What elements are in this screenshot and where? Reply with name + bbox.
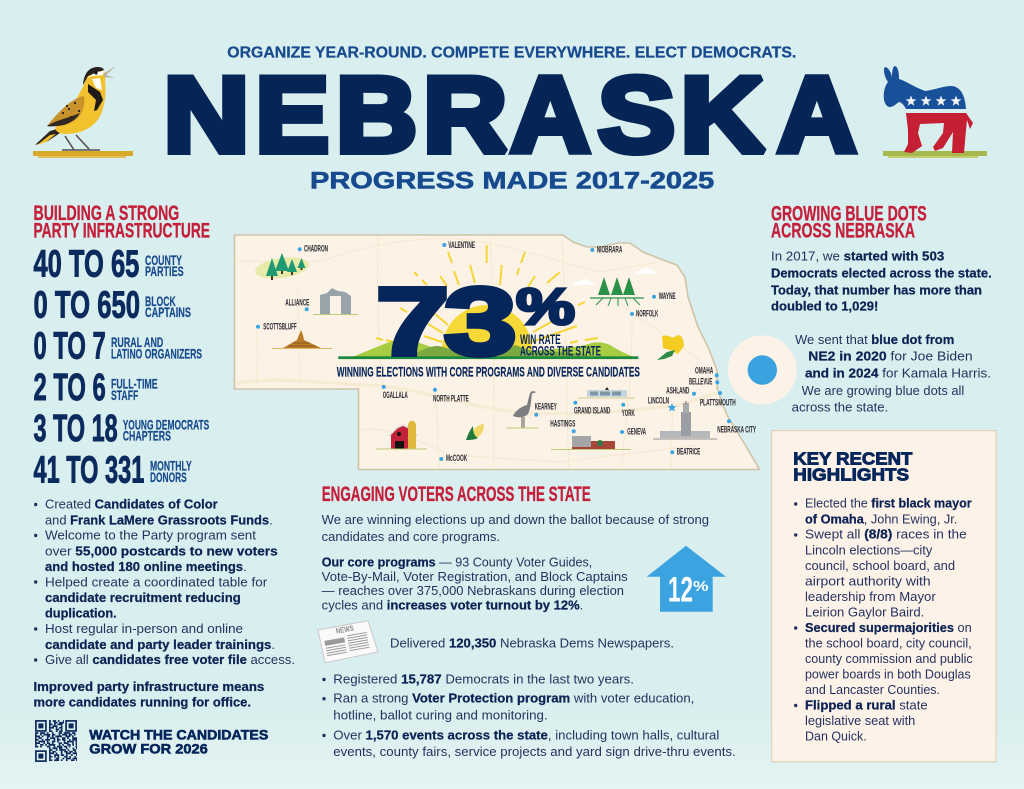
highlights list: county commission and public xyxy=(805,651,973,666)
text block: blue dot from NE2: across the state. xyxy=(792,399,888,414)
text block: infrastructure bullets xyxy=(34,497,295,667)
map panel: Nebraska xyxy=(234,235,760,470)
stat: rural and latino organizers: RURAL AND xyxy=(111,334,163,350)
heading: growing blue dots: ACROSS NEBRASKA xyxy=(771,220,915,243)
heading: growing blue dots: GROWING BLUE DOTS xyxy=(771,202,927,225)
icon: newspaper xyxy=(318,621,378,663)
map cities: KEARNEY xyxy=(535,402,557,412)
map cities: ASHLAND xyxy=(666,385,689,395)
highlights list: Swept all (8/8) races in the xyxy=(805,527,967,542)
callout: improved party infrastructure xyxy=(34,679,264,710)
highlights list: the school board, city council, xyxy=(805,635,972,650)
map cities: BEATRICE xyxy=(677,447,700,457)
map cities: NEBRASKA CITY xyxy=(717,425,756,435)
map cities: OGALLALA xyxy=(383,390,408,400)
arrow: 12% turnout increase xyxy=(647,546,726,612)
title xyxy=(164,54,856,175)
stat: full-time staff: 2 TO 6 xyxy=(34,367,106,409)
heading: building a strong party infrastructure: BUILDING A STRONG xyxy=(34,202,179,225)
map cities: CHADRON xyxy=(304,244,328,254)
text block: 503 to 1,029: In 2017, we started with 503 xyxy=(771,249,944,264)
text block: voter engagement bullets xyxy=(322,671,736,759)
map cities: WAYNE xyxy=(659,291,676,301)
map cities: OMAHA xyxy=(695,365,714,375)
text block: blue dot from NE2: We sent that blue dot from xyxy=(795,332,954,347)
text block: core programs xyxy=(322,555,628,612)
title: A xyxy=(778,54,856,174)
callout: improved party infrastructure: Improved party infrastructure means xyxy=(34,679,264,694)
stat: county parties: COUNTY xyxy=(145,252,182,268)
stat: full-time staff: FULL-TIME xyxy=(111,376,158,392)
text block: infrastructure bullets: Host regular in-person and online xyxy=(45,621,243,636)
panel heading: HIGHLIGHTS xyxy=(793,464,909,484)
map cities: McCOOK xyxy=(446,453,468,463)
heading: growing blue dots xyxy=(771,202,927,243)
text block: infrastructure bullets: and hosted 180 online meetings . xyxy=(45,559,247,574)
win rate figure 73%: 7 xyxy=(376,269,449,375)
text block: infrastructure bullets: Welcome to the Party program sent xyxy=(45,528,256,543)
stat: monthly donors: DONORS xyxy=(150,469,187,485)
icon: QR code xyxy=(35,721,77,761)
text block: 503 to 1,029 xyxy=(771,249,992,314)
text block: infrastructure bullets: Give all candidates free voter file access. xyxy=(45,652,295,667)
map cities: GRAND ISLAND xyxy=(574,406,610,416)
title: S xyxy=(598,54,675,175)
subtitle: PROGRESS MADE 2017-2025 xyxy=(310,167,714,194)
stat: young democrats chapters: CHAPTERS xyxy=(123,428,171,444)
highlights list: Flipped a rural state xyxy=(805,697,928,712)
icon: corn xyxy=(466,424,484,440)
icon: Chimney Rock xyxy=(272,330,332,348)
text block: winning elections: candidates and core programs. xyxy=(322,529,500,544)
title: R xyxy=(423,55,507,174)
icon: Grand Island building xyxy=(578,387,635,398)
text block: infrastructure bullets: Helped create a coordinated table for xyxy=(45,574,268,589)
highlights list: council, school board, and xyxy=(805,558,955,573)
text block: infrastructure bullets: over 55,000 postcards to new voters xyxy=(45,543,278,558)
text block: infrastructure bullets: duplication. xyxy=(45,606,117,621)
icon: Hastings building xyxy=(551,436,631,450)
icon: goldenrod xyxy=(657,335,684,360)
title: K xyxy=(680,55,765,174)
icon: farm trees xyxy=(590,277,644,306)
highlights list: Lincoln elections—city xyxy=(805,542,933,557)
panel heading: KEY RECENT xyxy=(793,448,913,468)
tagline: ORGANIZE YEAR-ROUND. COMPETE EVERYWHERE. ELECT DEMOCRATS. xyxy=(227,45,796,62)
title: A xyxy=(510,56,590,175)
text block: blue dot from NE2: We are growing blue dots all xyxy=(802,383,964,398)
stat: rural and latino organizers xyxy=(34,325,202,367)
text block: voter engagement bullets: Ran a strong Voter Protection program with voter education, xyxy=(333,691,694,706)
stat: monthly donors: MONTHLY xyxy=(150,458,192,474)
text block: blue dot from NE2: NE2 in 2020 for Joe Biden xyxy=(808,349,973,364)
heading: building a strong party infrastructure xyxy=(34,202,210,243)
text block: blue dot from NE2: and in 2024 for Kamala Harris. xyxy=(805,366,991,381)
stat: young democrats chapters: YOUNG DEMOCRATS xyxy=(123,416,209,432)
stat: young democrats chapters: 3 TO 18 xyxy=(34,408,118,450)
highlights list: Leirion Gaylor Baird. xyxy=(805,604,924,619)
stat: rural and latino organizers: 0 TO 7 xyxy=(34,325,106,367)
call to action: watch the candidates xyxy=(89,727,268,756)
text block: core programs: Vote-By-Mail, Voter Registration, and Block Captains xyxy=(322,569,628,584)
panel: key recent highlights xyxy=(772,431,996,762)
heading: building a strong party infrastructure: PARTY INFRASTRUCTURE xyxy=(34,220,210,243)
highlights list: legislative seat with xyxy=(805,713,915,728)
stat: rural and latino organizers: LATINO ORGANIZERS xyxy=(111,345,202,361)
map cities: NORTH PLATTE xyxy=(433,393,469,403)
highlights list xyxy=(794,496,973,743)
icon: Carhenge arch xyxy=(313,288,358,314)
title: B xyxy=(336,56,417,175)
stat: county parties: 40 TO 65 xyxy=(34,244,139,286)
stat: county parties: PARTIES xyxy=(145,263,184,279)
text block: winning elections xyxy=(322,512,709,544)
map cities xyxy=(256,240,756,463)
map cities: GENEVA xyxy=(627,426,646,436)
icon: meadowlark xyxy=(33,66,133,158)
win rate label: ACROSS THE STATE xyxy=(520,343,601,359)
text block: voter engagement bullets: events, county fairs, service projects and yard sign drive-thru events. xyxy=(333,744,736,759)
text block: winning elections: We are winning elections up and down the ballot because of strong xyxy=(322,512,709,527)
title: E xyxy=(256,56,329,175)
sun and rays xyxy=(376,245,598,343)
text block: infrastructure bullets: Created Candidates of Color xyxy=(45,497,218,512)
icon: pine trees xyxy=(254,253,310,282)
highlights list: Elected the first black mayor xyxy=(805,496,972,511)
arrow: 12% turnout increase: 12 xyxy=(668,571,693,610)
stat: full-time staff: STAFF xyxy=(111,387,139,403)
map cities: BELLEVUE xyxy=(689,377,712,387)
map cities: LINCOLN xyxy=(648,395,669,405)
icon: sandhill crane xyxy=(506,391,538,428)
win rate figure 73%: 3 xyxy=(444,268,517,375)
text block: infrastructure bullets: candidate and party leader trainings . xyxy=(45,637,275,652)
text block: core programs: Our core programs — 93 County Voter Guides, xyxy=(322,555,592,570)
win rate figure 73%: % xyxy=(516,278,575,335)
icon: newspaper: NEWS xyxy=(335,624,355,636)
map cities: SCOTTSBLUFF xyxy=(263,321,297,331)
call to action: watch the candidates: WATCH THE CANDIDATES xyxy=(89,727,268,742)
highlights list: and Lancaster Counties. xyxy=(805,682,940,697)
text block: voter engagement bullets: Over 1,570 events across the state , including town halls, cultural xyxy=(333,727,719,742)
map cities: HASTINGS xyxy=(550,418,575,428)
map cities: ALLIANCE xyxy=(285,297,309,307)
win rate figure 73% xyxy=(376,268,575,375)
icon: barn and silo xyxy=(376,421,427,449)
highlights list: Dan Quick. xyxy=(805,728,867,743)
highlights list: power boards in both Douglas xyxy=(805,666,971,681)
arrow: 12% turnout increase: % xyxy=(693,578,708,595)
panel heading xyxy=(793,448,913,484)
text block: 503 to 1,029: Today, that number has more than xyxy=(771,282,982,297)
map cities: NIOBRARA xyxy=(597,244,623,254)
callout: improved party infrastructure: more candidates running for office. xyxy=(34,695,251,710)
highlights list: of Omaha, John Ewing, Jr. xyxy=(805,511,957,526)
text block: infrastructure bullets: candidate recruitment reducing xyxy=(45,590,241,605)
icon: blue dot xyxy=(728,336,797,404)
state outline xyxy=(234,235,760,470)
stat: block captains: BLOCK xyxy=(145,293,176,309)
text: delivered newspapers: Delivered 120,350 Nebraska Dems Newspapers. xyxy=(390,636,674,651)
icon: clouds xyxy=(572,268,658,285)
text block: core programs: — reaches over 375,000 Nebraskans during election xyxy=(322,583,624,598)
highlights list: leadership from Mayor xyxy=(805,589,936,604)
text block: 503 to 1,029: Democrats elected across the state. xyxy=(771,265,992,280)
text block: infrastructure bullets: and Frank LaMere Grassroots Funds. xyxy=(45,512,273,527)
stat: monthly donors: 41 TO 331 xyxy=(34,450,144,492)
map cities: NORFOLK xyxy=(636,309,659,319)
hills xyxy=(352,340,450,357)
stat list xyxy=(34,244,209,492)
text block: blue dot from NE2 xyxy=(792,332,991,414)
heading: engaging voters: ENGAGING VOTERS ACROSS THE STATE xyxy=(322,483,591,506)
highlights list: airport authority with xyxy=(805,573,931,588)
icon: Nebraska State Capitol xyxy=(653,401,717,439)
map cities: YORK xyxy=(622,408,635,418)
text block: voter engagement bullets: Registered 15,787 Democrats in the last two years. xyxy=(333,671,634,686)
stat: block captains: 0 TO 650 xyxy=(34,285,140,327)
text block: 503 to 1,029: doubled to 1,029! xyxy=(771,299,878,314)
title: N xyxy=(164,55,249,174)
map caption: WINNING ELECTIONS WITH CORE PROGRAMS AND DIVERSE CANDIDATES xyxy=(337,365,640,380)
map cities: PLATTSMOUTH xyxy=(700,398,736,408)
stat: block captains: CAPTAINS xyxy=(145,304,191,320)
win rate label xyxy=(520,331,601,359)
highlights list: Secured supermajorities on xyxy=(805,620,972,635)
text block: core programs: cycles and increases voter turnout by 12%. xyxy=(322,597,583,612)
map cities: VALENTINE xyxy=(448,240,475,250)
win rate label: WIN RATE xyxy=(520,331,561,347)
call to action: watch the candidates: GROW FOR 2026 xyxy=(89,741,208,756)
text block: voter engagement bullets: hotline, ballot curing and monitoring. xyxy=(333,707,548,722)
icon: democratic donkey xyxy=(883,66,987,158)
